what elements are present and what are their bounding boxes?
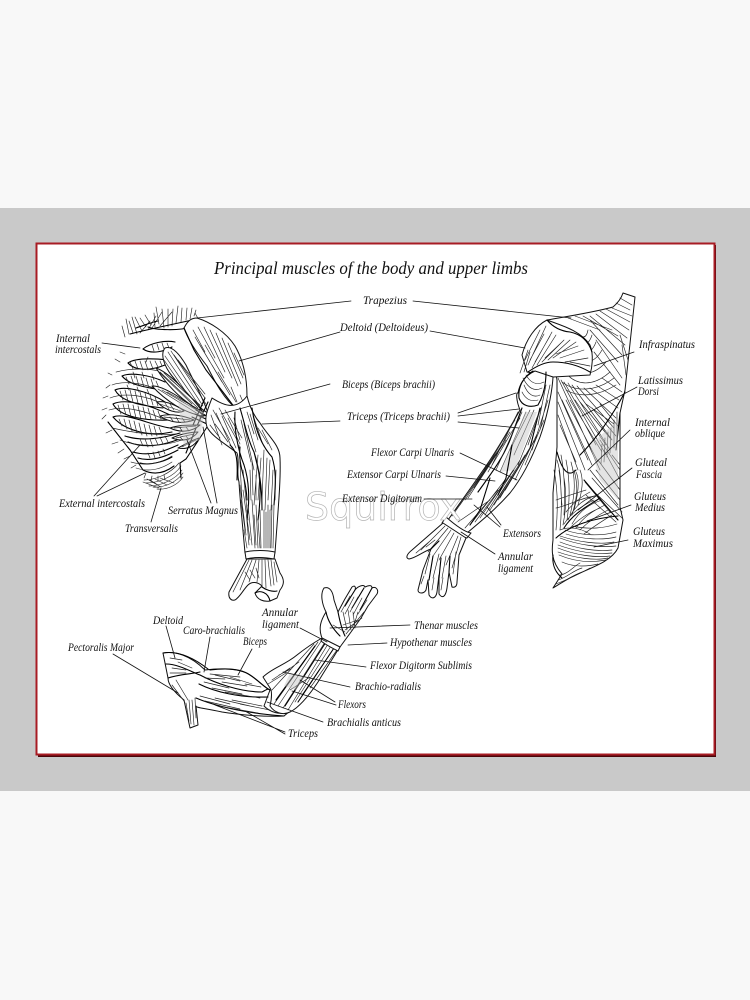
label: Caro-brachialis: Caro-brachialis xyxy=(183,623,245,637)
label: Brachio-radialis: Brachio-radialis xyxy=(355,679,421,693)
deltoid xyxy=(184,318,247,411)
label: Annular ligament lower: Annular xyxy=(261,605,298,619)
label: Deltoid: Deltoid (Deltoideus) xyxy=(339,320,428,334)
label: Biceps: Biceps (Biceps brachii) xyxy=(342,377,435,391)
label: Gluteal Fascia xyxy=(578,455,668,510)
label: Triceps lower xyxy=(215,705,318,740)
label: Thenar muscles: Thenar muscles xyxy=(414,618,478,632)
upper arm xyxy=(163,653,290,728)
label: Annular ligament: ligament xyxy=(498,561,534,575)
grey band xyxy=(0,208,750,791)
label: Annular ligament lower xyxy=(261,605,327,642)
label: Gluteal Fascia: Fascia xyxy=(635,467,662,481)
label: Flexor Carpi Ulnaris: Flexor Carpi Ulnaris xyxy=(370,445,454,459)
label: Internal oblique: Internal xyxy=(634,415,671,429)
wrist band xyxy=(245,550,275,559)
label: Infraspinatus: Infraspinatus xyxy=(638,337,695,351)
label: Caro-brachialis xyxy=(183,623,245,672)
label: Brachialis anticus: Brachialis anticus xyxy=(327,715,401,729)
label: Flexors xyxy=(292,680,366,711)
poster panel xyxy=(36,244,716,757)
label: Gluteus Maximus xyxy=(594,524,673,550)
label: Pectoralis Major xyxy=(67,640,178,693)
label: Biceps lower xyxy=(238,634,267,675)
figure: front torso and arm xyxy=(102,306,283,601)
serratus and pectoral bands xyxy=(152,347,210,478)
wrist band xyxy=(321,637,340,651)
label: Gluteus Medius xyxy=(587,489,666,521)
label: Internal oblique: oblique xyxy=(635,426,666,440)
label: Serratus Magnus xyxy=(168,427,238,517)
label: Extensors: Extensors xyxy=(502,526,541,540)
label: Annular ligament lower: ligament xyxy=(262,617,300,631)
label: Internal intercostals xyxy=(55,331,140,356)
arm xyxy=(448,371,553,533)
label: Brachio-radialis xyxy=(283,672,421,693)
figure: flexed arm xyxy=(163,586,378,728)
label: Transversalis: Transversalis xyxy=(125,521,178,535)
label: Hypothenar muscles xyxy=(348,635,472,649)
title: Principal muscles of the body and upper limbs xyxy=(213,258,528,278)
rib cage xyxy=(102,341,204,489)
label: Extensors xyxy=(474,505,541,540)
label: Trapezius xyxy=(197,293,571,318)
torso xyxy=(547,293,635,588)
label: Flexor Digitorm Sublimis xyxy=(315,658,472,672)
label: Gluteus Medius: Gluteus xyxy=(634,489,666,503)
label: Serratus Magnus: Serratus Magnus xyxy=(168,503,238,517)
label: Triceps xyxy=(262,409,519,428)
label: Biceps xyxy=(221,377,519,416)
label: Extensor Digitorum: Extensor Digitorum xyxy=(341,491,422,505)
label: Hypothenar muscles: Hypothenar muscles xyxy=(389,635,472,649)
neck and clavicle fibres xyxy=(122,306,200,337)
label: Flexor Digitorm Sublimis: Flexor Digitorm Sublimis xyxy=(369,658,472,672)
label: Transversalis xyxy=(125,488,178,535)
hand xyxy=(229,559,283,601)
label: Latissimus Dorsi xyxy=(582,373,683,416)
label: Deltoid xyxy=(239,320,525,361)
label: Internal intercostals: intercostals xyxy=(55,342,101,356)
label: Trapezius: Trapezius xyxy=(363,293,407,307)
label: Brachialis anticus xyxy=(267,702,401,729)
label: Biceps lower: Biceps xyxy=(243,634,267,648)
figure: back torso and arm xyxy=(407,293,635,598)
label: External intercostals xyxy=(58,445,145,510)
label: Annular ligament xyxy=(461,532,534,575)
label: Triceps lower: Triceps xyxy=(288,726,318,740)
label: Thenar muscles xyxy=(330,618,478,632)
label: Internal intercostals: Internal xyxy=(55,331,91,345)
label: Latissimus Dorsi: Dorsi xyxy=(637,384,659,398)
label: Gluteus Maximus: Gluteus xyxy=(633,524,665,538)
forearm xyxy=(263,638,339,714)
hand xyxy=(320,586,378,647)
label: Extensor Carpi Ulnaris: Extensor Carpi Ulnaris xyxy=(346,467,441,481)
label: Flexors: Flexors xyxy=(337,697,366,711)
shoulder xyxy=(520,320,592,377)
label: Gluteus Maximus: Maximus xyxy=(632,536,673,550)
label: Gluteus Medius: Medius xyxy=(634,500,665,514)
wrist band xyxy=(442,517,471,538)
label: Annular ligament: Annular xyxy=(497,549,533,563)
watermark: Squirrox xyxy=(305,485,462,529)
label: Deltoid lower: Deltoid xyxy=(152,613,184,627)
label: Infraspinatus xyxy=(594,337,695,366)
label: Deltoid lower xyxy=(152,613,184,658)
label: External intercostals: External intercostals xyxy=(58,496,145,510)
label: Internal oblique xyxy=(588,415,671,470)
upper and lower arm xyxy=(206,396,280,553)
label: Latissimus Dorsi: Latissimus xyxy=(637,373,683,387)
hand xyxy=(407,523,466,598)
label: Gluteal Fascia: Gluteal xyxy=(635,455,668,469)
label: Triceps: Triceps (Triceps brachii) xyxy=(347,409,450,423)
label: Pectoralis Major: Pectoralis Major xyxy=(67,640,134,654)
label: Flexor Carpi Ulnaris xyxy=(370,445,517,480)
